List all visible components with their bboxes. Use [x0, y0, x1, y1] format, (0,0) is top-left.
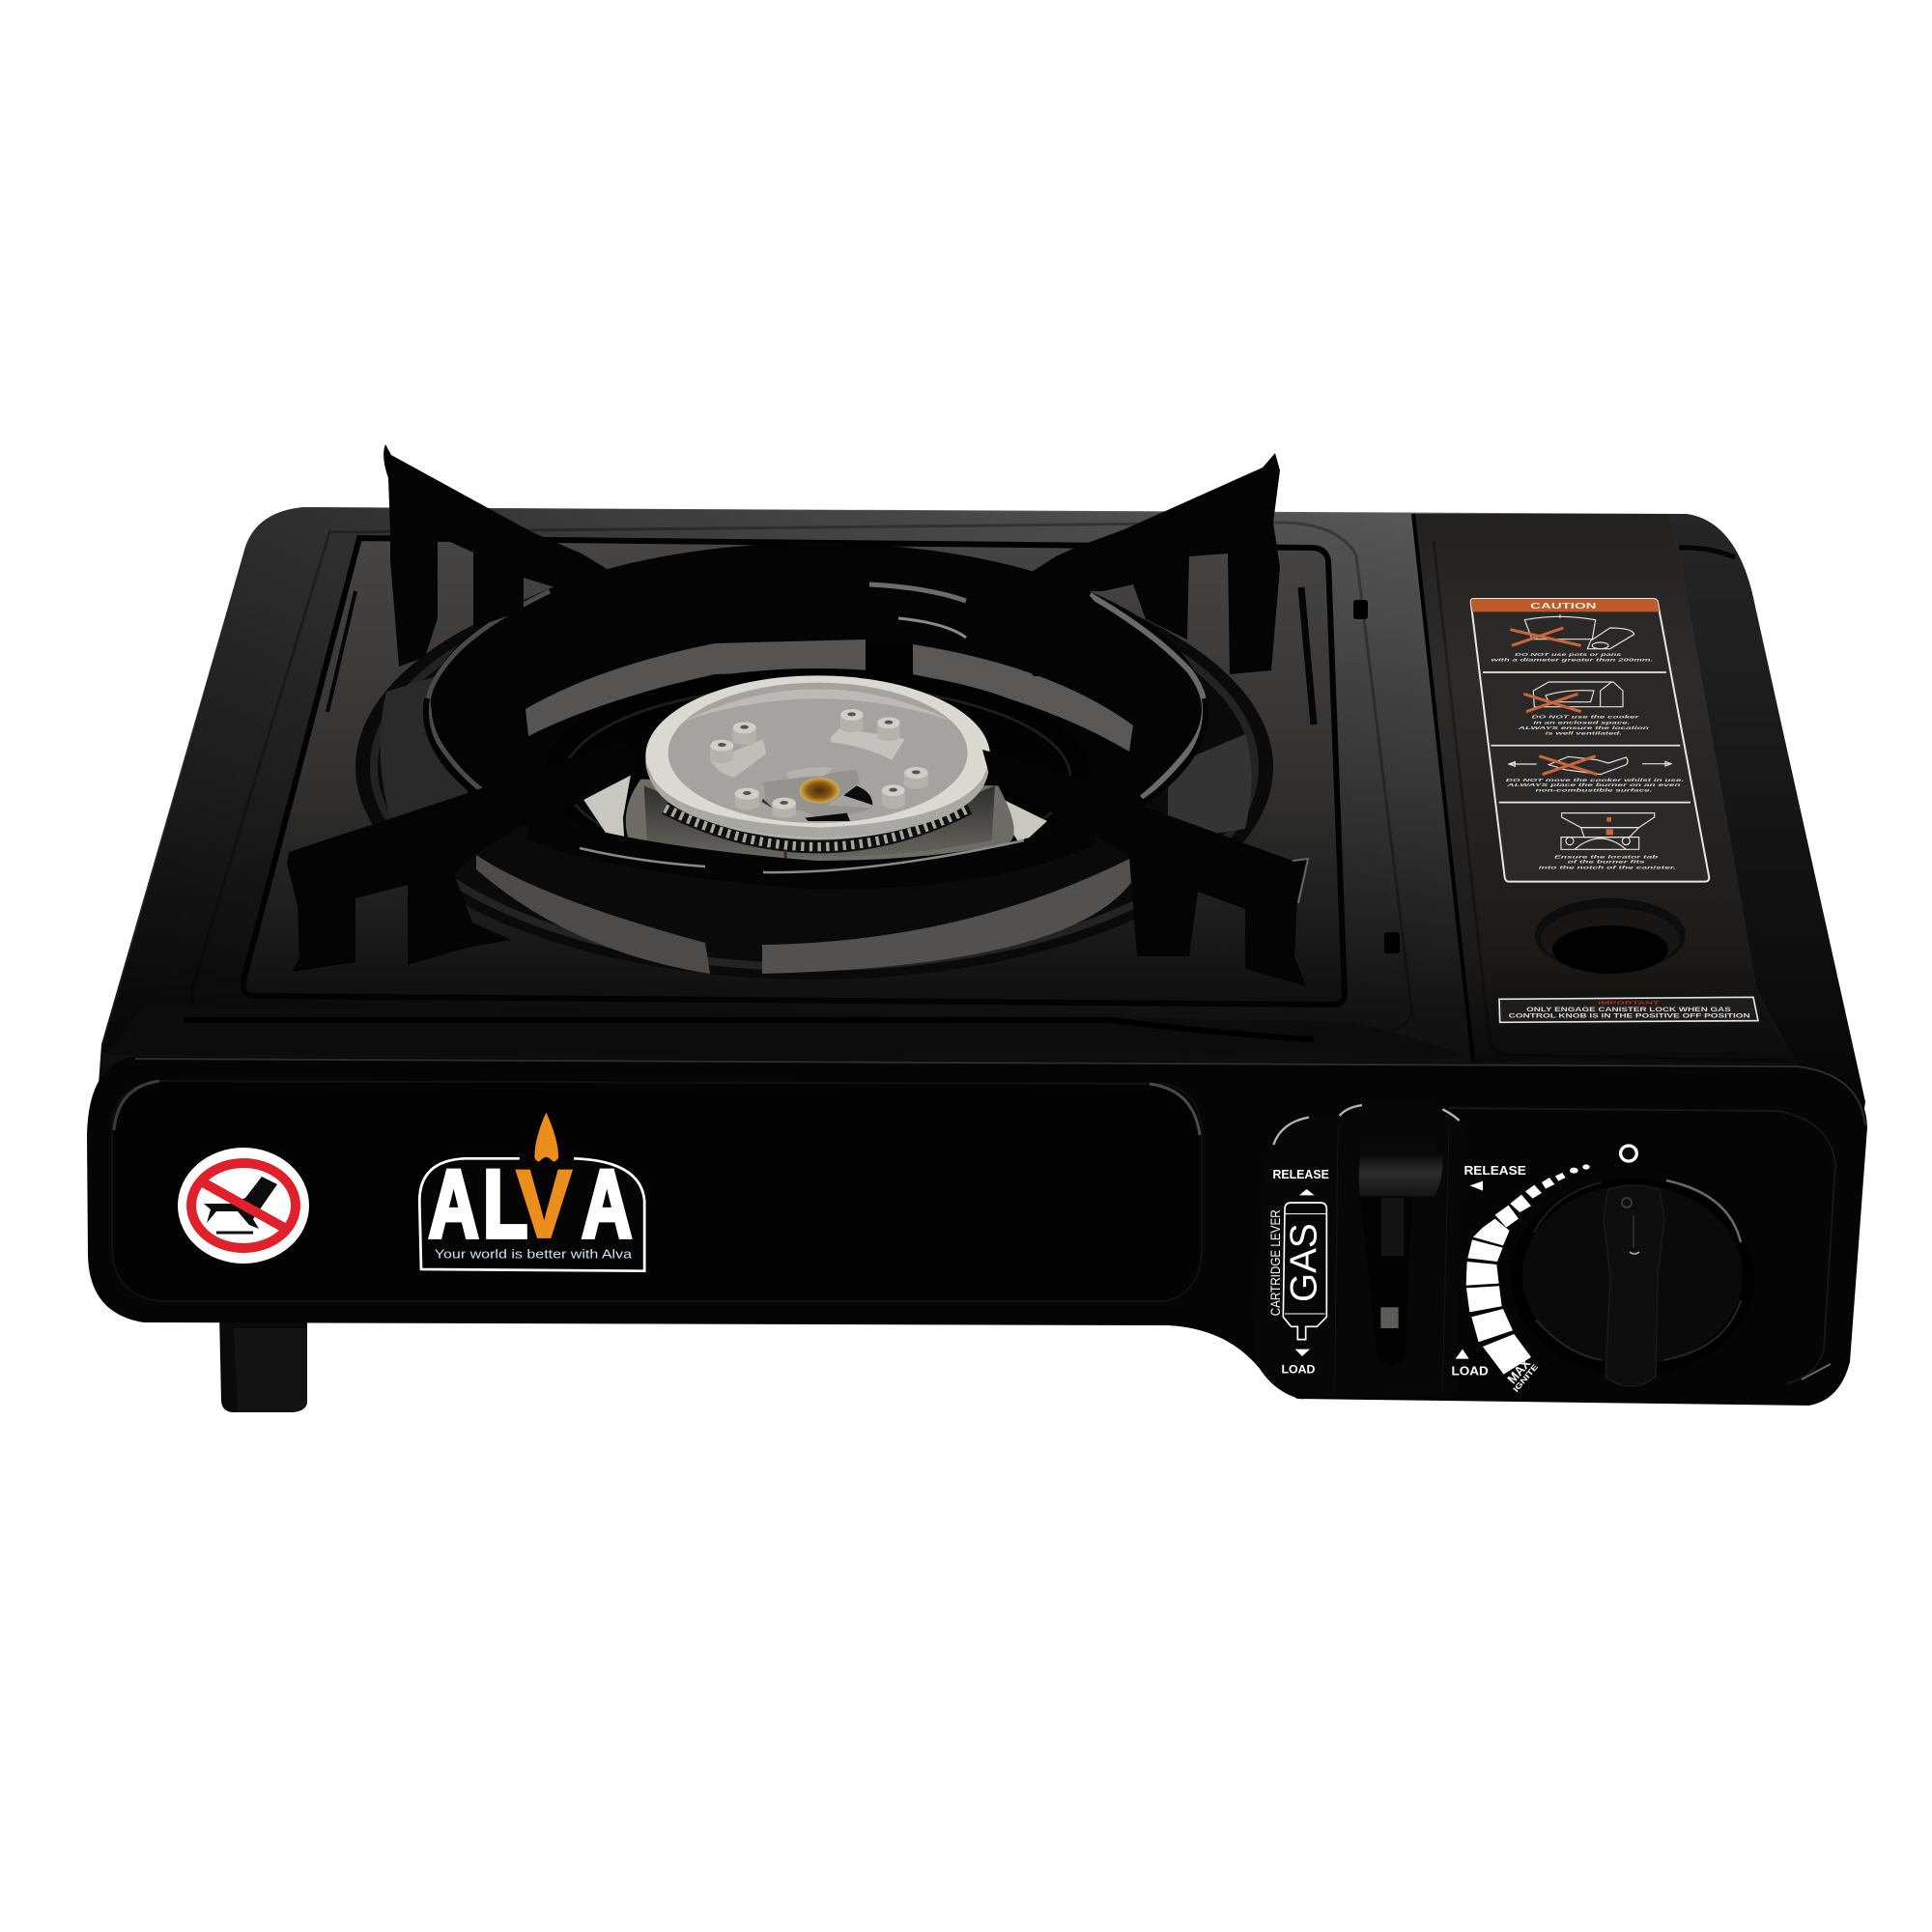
pot support arm: rear left — [384, 444, 657, 667]
bowl rim side shine — [428, 591, 550, 791]
wordmark: V — [516, 1151, 572, 1258]
front support tube — [426, 698, 1206, 879]
caution sticker: with a diameter greater than 200mm. — [1491, 658, 1653, 664]
wordmark: A — [429, 1151, 479, 1258]
highlights on bowl wall — [869, 584, 966, 601]
Alva logo — [419, 1113, 644, 1271]
burner ring — [645, 682, 990, 839]
warning sticker: ONLY ENGAGE CANISTER LOCK WHEN GAS — [1526, 1007, 1731, 1013]
pot support arm: front left — [287, 743, 634, 972]
caption 4: Ensure the locator tab — [1554, 854, 1658, 860]
outer depression — [355, 554, 1273, 980]
caution header — [1471, 599, 1660, 611]
flame — [534, 1113, 558, 1161]
inner dark basin — [545, 668, 1090, 877]
caution sticker: of the burner fits — [1568, 860, 1645, 866]
cooking pan recess — [243, 538, 1345, 1005]
max label: MAX — [1504, 1356, 1533, 1386]
caption 3: DO NOT move the cooker whilst in use. — [1506, 778, 1684, 783]
pot support arm: front right — [982, 750, 1308, 986]
slider slot — [1360, 1195, 1412, 1365]
pictogram: oversized pot — [1510, 614, 1634, 649]
rear foot — [219, 1314, 307, 1412]
control knob — [1511, 1179, 1754, 1386]
cartridge cover panel — [1413, 514, 1798, 1063]
base plate wedges — [582, 773, 631, 847]
load label: LOAD — [1281, 1363, 1316, 1377]
tagline: Your world is better with Alva — [435, 1247, 633, 1262]
pictogram: enclosed space — [1523, 682, 1623, 712]
flame ports — [665, 809, 969, 847]
inset panel — [112, 1081, 1202, 1301]
cartridge lever label: CARTRIDGE LEVER — [1267, 1209, 1283, 1316]
right bracket — [831, 727, 905, 760]
upper reflection bands — [526, 639, 866, 736]
brass injector — [800, 778, 839, 804]
slider handle — [1359, 1156, 1443, 1196]
pot support arm: rear right — [991, 453, 1280, 676]
right end detailing — [1449, 1108, 1835, 1383]
load label: LOAD — [1451, 1364, 1489, 1378]
gas label: GAS — [1283, 1223, 1325, 1302]
gas cartridge icon — [1283, 1203, 1326, 1340]
caution sticker — [1471, 599, 1709, 882]
wordmark — [429, 1151, 632, 1258]
front fascia — [87, 1057, 1867, 1406]
warning sticker — [1499, 997, 1758, 1022]
flame level scale — [1466, 1164, 1590, 1375]
cartridge lever module — [1253, 1104, 1462, 1399]
caution sticker: is well ventilated. — [1546, 730, 1622, 736]
caption 1: DO NOT use pots or pans — [1515, 652, 1622, 658]
pictogram: locator tab — [1561, 813, 1655, 849]
warning sticker: IMPORTANT — [1598, 1000, 1660, 1005]
centre cross — [763, 770, 872, 821]
release label: RELEASE — [1463, 1163, 1526, 1178]
caution sticker: CAUTION — [1530, 602, 1597, 611]
off marker — [1621, 1146, 1636, 1161]
pictogram: do not move — [1509, 756, 1671, 775]
caution sticker: in an enclosed space. — [1533, 720, 1630, 725]
burner — [582, 675, 1047, 867]
caption 2: DO NOT use the cooker — [1531, 715, 1641, 721]
caution sticker: ALWAYS place the burner on an even — [1505, 782, 1681, 788]
ignite label: IGNITE — [1512, 1362, 1541, 1394]
front slot tab — [1384, 932, 1400, 953]
stove deck — [97, 507, 1865, 1140]
caution sticker: non-combustible surface. — [1535, 787, 1652, 793]
bolts — [710, 715, 928, 818]
rear rim lip — [192, 523, 1412, 1036]
knob handle — [1604, 1185, 1664, 1386]
flame control markings — [1451, 1146, 1636, 1394]
release label: RELEASE — [1272, 1168, 1329, 1181]
cast plate — [668, 683, 968, 823]
caution sticker: ALWAYS ensure the location — [1517, 725, 1649, 731]
burner cup — [626, 780, 1014, 867]
front lip band — [106, 1005, 1468, 1058]
burner bowl — [427, 543, 1206, 974]
vent hole — [1535, 898, 1686, 972]
logo frame — [419, 1158, 644, 1271]
wordmark: A — [582, 1151, 632, 1258]
warning sticker: CONTROL KNOB IS IN THE POSITIVE OFF POSITION — [1509, 1013, 1750, 1020]
caution sticker: into the notch of the canister. — [1539, 866, 1676, 871]
lower reflection bands — [762, 857, 1137, 974]
left bracket — [710, 739, 766, 778]
rear tab slots — [1353, 600, 1368, 619]
cartridge compartment side band — [1668, 514, 1865, 1102]
no-touch warning icon — [178, 1148, 309, 1264]
wordmark: L — [483, 1151, 527, 1258]
